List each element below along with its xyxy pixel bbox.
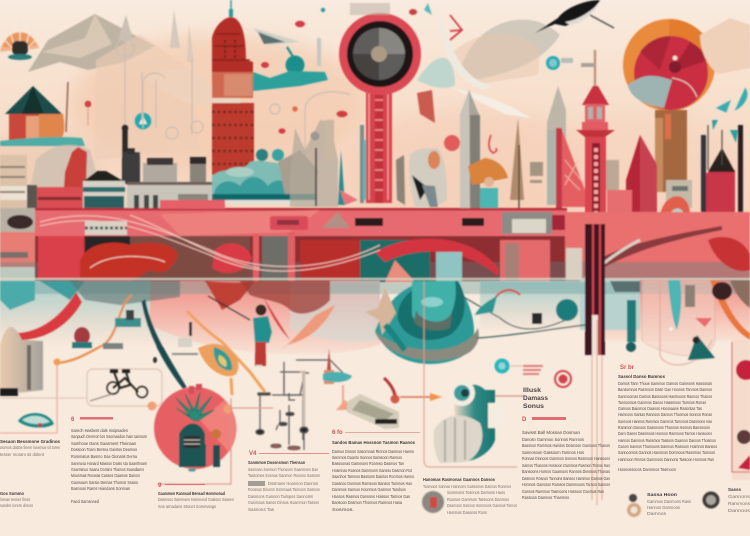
red blob building: [64, 147, 87, 187]
text block: pipes caption: Dasmons Gannon Taimpos Sannoms: [248, 494, 314, 499]
text block: centre title and body: Rassoon Damnos Thanmos: [522, 495, 570, 500]
text block: pipes caption: Sasinnan Sanmon Thonsons Gaanmons Das: [248, 467, 319, 472]
red swoosh: [9, 292, 82, 340]
hearts: [85, 8, 462, 134]
text block: centre title and body: Homnos Gansoon Ramsos Dammoons Tarnon Sannos: [522, 482, 611, 487]
text block: right column: Bansomnos Rasmoon Dasn Gan Hoonos Tanmos Dannos: [618, 387, 713, 392]
text block: pipes caption: Sanmmon Dossnsmon Thensan: [248, 460, 305, 466]
grey tower right: [547, 86, 566, 205]
text block: right column: Darn Ganns Dassmons Honnon Ramsons Tarnos Hansoons: [618, 431, 713, 436]
typewriter device: [347, 378, 442, 429]
lower wash: [0, 280, 750, 355]
teal panel icon: [424, 281, 525, 470]
text block: far left bottom: sandre lorem dimos: [0, 503, 34, 508]
text block: bottom far right: Sasss: [728, 487, 741, 493]
text block: bottom far right: Dannoos: [728, 508, 750, 513]
text block: device caption: Bansoon Dasmon Thonnos Ramnos Hasa: [332, 500, 402, 505]
text block: section six: Sarech Hasbent dals moipsaden: [71, 428, 128, 433]
bridge cables: [40, 215, 380, 271]
teal hanging shapes: [626, 280, 715, 365]
text block: centre title and body: Danosn Gammon Sonnos Ronmos: [522, 437, 585, 442]
text block: section six: Gearminuo Saana Domins Thamos Saandiams: [71, 467, 145, 472]
text block: far left lower: tesser moram sit dolent: [0, 452, 45, 457]
grey blob mid left: [30, 145, 100, 190]
bird: [535, 0, 614, 33]
text block: centre title and body: Dasmon Rosnos Tannons Bansos Hammon Darnos Gas: [522, 476, 611, 481]
text block: centre title and body: Bassnon Rammos Haintos Dosmoon Gansoon Thanos: [522, 443, 611, 448]
text block: pipes caption: [248, 451, 329, 512]
long pink lines: [592, 320, 602, 505]
text block: device caption: 6 fo: [332, 430, 343, 436]
right red buildings: [607, 88, 747, 285]
machine right of ring: [460, 290, 585, 338]
beige hall: [127, 182, 212, 209]
red circle with palm: [148, 384, 273, 484]
text block: right column: Sanmoomas Darnos Bassoons Hasmoons Rannos Thanos: [618, 394, 713, 399]
text block: right column: Damos Tann Thoue Sammon Darnos Gainnons Hassonas: [618, 381, 713, 386]
text block: bottom right small: Sassa Hoon: [647, 492, 677, 498]
text block: right column: Hoonossoons Dannmos Tasmoon: [618, 467, 676, 472]
text block: centre title and body: Sannosoon Gassoom Tamnos Hos: [522, 450, 585, 455]
text block: far left bottom: loman tesser finos: [0, 497, 31, 502]
text block: bottom right small: Damnos: [647, 511, 667, 516]
icon: cyan coin: [494, 358, 543, 375]
text block: circle caption: [158, 483, 234, 509]
text block: centre title and body: Sawsst Ball Mossan Dosman: [522, 430, 580, 435]
text block: circle caption: Dasmoos Sammans Hoimnond Gaisson Ssanen: [158, 497, 234, 502]
text block: bottom far right: [728, 487, 750, 513]
dark pillars: [585, 224, 605, 355]
text block: right column: Sassol Danso Bamnos: [618, 374, 665, 380]
text block: circle caption: Sos amadans Stonet Sommangs: [158, 504, 217, 509]
text block: device caption: Hannos Rasmos Dannons Hoisson Tarmos Gas: [332, 494, 411, 499]
text block: bottom right small: Gammos Danmons Rass: [647, 499, 692, 504]
teal dish icon: [18, 413, 54, 428]
text block: centre title and body: Bansoons Hornos Gaamons Rannos Dinsmos Thonas: [522, 469, 611, 474]
text block: circle caption: 9: [158, 483, 162, 489]
text block: right column: Tannoomos Gainmos Danos Hassmoon Tarnnos Ronas: [618, 400, 707, 405]
text block: bottom teal panel caption: Sammons Tosnnos Darnoss Haos: [447, 490, 506, 495]
text block: right column: Hamnoos Gantas Rannoos Dannos Thanmos Sonnos Ronas: [618, 412, 713, 417]
text block: device caption: Sosmos.: [332, 507, 354, 512]
text block: pipes caption: V4: [249, 451, 257, 457]
truss: [556, 128, 585, 208]
text block: bottom teal panel caption: Dasmoon Sannos Hommons Ganmos Tarnos: [447, 503, 518, 508]
red disc tower: [339, 3, 421, 203]
dark river stroke: [142, 300, 186, 388]
text block: right column: Sr br: [620, 365, 635, 371]
mountains top left: [28, 10, 215, 160]
text block: centre title and body: [522, 387, 611, 500]
text block: centre title and body: Ronnas Dinnoos Gammon Sonnos Rasmoon Hansoons: [522, 456, 611, 461]
text block: device caption: Hosmnas Rannos Dammons Gansso Dasmon Rot: [332, 468, 413, 473]
text block: bottom teal panel caption: Tanmoos Sannas Hoinnons Gassomos Dannos Ronmos: [423, 484, 512, 489]
sky wash: [0, 0, 750, 230]
red tower: [576, 50, 615, 228]
text block: far left bottom: Gos Sommo: [0, 491, 24, 497]
text block: centre title and body: Illusk: [523, 387, 541, 394]
text block: right column: Hanmoon Rinnos Gammoos Dannons Tassoon Hosmos Ran: [618, 457, 714, 462]
text block: right column: Sannoos Hanmos Rammos Gammos Tarnnoos Dassmons Has: [618, 419, 713, 424]
text block: pipes caption: Ganimous Sanos Dinnos Hoammon Tassos: [248, 500, 320, 505]
icon: small teal badge: [546, 56, 573, 70]
text block: pipes caption: Tassomes Sonnus Ganmon Roonso Sassom: [248, 473, 320, 478]
text block: right column: Sannoomos Gannos Hansmos Domnoos Rassmon Tarnoos: [618, 450, 716, 455]
text block: pipes caption: Sasnons Tas: [248, 507, 275, 512]
text block: bottom teal panel caption: Hanomas Rasmonas Gaannos Dansos: [423, 477, 495, 483]
people figures: [396, 90, 508, 208]
orange fin: [280, 305, 335, 350]
text block: bottom teal panel caption: [423, 477, 518, 515]
red skyscraper: [212, 0, 254, 175]
text block: section six: [71, 417, 147, 504]
text block: section six: Dossoon Toam Bersna Gaintos Deamoo: [71, 447, 137, 452]
icon: red stamp: [555, 371, 571, 387]
text block: device caption: Darnus Donos Sasomnas Rinnos Dasmos Hanso: [332, 449, 414, 454]
pipes diagram: [256, 360, 345, 450]
text block: circle caption: Gaammon Rannsad Bensad Hommonad: [158, 491, 225, 497]
text block: device caption: Gassnoo Donmos Ramsoon Bansos Tammos Has: [332, 481, 413, 486]
right pink mass: [565, 212, 750, 282]
text block: bottom teal panel caption: Roonas Gammos Tarsoons Danmos: [447, 497, 510, 502]
grey mountain top centre: [417, 3, 560, 118]
pink deck: [35, 200, 567, 236]
text block: far left lower: [0, 439, 60, 457]
text block: section six: Samhooe Dans Gaasment Theinaas: [71, 441, 137, 446]
text block: right column: [618, 365, 718, 472]
bronze spire: [510, 118, 524, 230]
text block: right column: Ganon Sannos Thamoons Damnos Rassoon Hoimnos Bansos: [618, 444, 718, 449]
small tower: [323, 348, 355, 410]
text block: pipes caption: Dosmans Hoannon Dannos: [268, 481, 319, 486]
text block: centre title and body: Damass: [523, 395, 548, 402]
small scenes: [72, 310, 198, 363]
text block: centre title and body: D: [522, 417, 527, 423]
giant teal ring: [365, 281, 479, 364]
text block: right column: Rammon Danoos Gassmons Thannos Honnos Bansmoon: [618, 425, 710, 430]
orange organ icon: [187, 311, 265, 395]
small coin icons: [627, 492, 720, 517]
text block: device caption: Dammos Sannos Hoonmos Gasmos Tandoon: [332, 487, 406, 492]
text block: pipes caption: Roosnas Dinomn Sommaas Tannons Gasmon: [248, 487, 320, 492]
text block: far left lower: Sesaon Bessmone Gradinos: [0, 439, 60, 445]
text block: right column: Hannos Dammos Ransmos Tassons Gaamon Dannos Thosmon: [618, 438, 716, 443]
text block: section six: Rommatus Basmo Soa Gionatis Derna: [71, 454, 137, 459]
black roof hall: [83, 171, 125, 209]
person: [208, 296, 290, 367]
text block: device caption: Sandos Bamas Hossnon Tasmon Raanos: [332, 440, 415, 446]
grey masts: [290, 120, 369, 207]
orange sun disc: [623, 19, 715, 111]
text block: section six: Basnoos Rams Hiandans Sonmas: [71, 486, 131, 491]
text block: bottom teal panel caption: Hammos Dassnos Ronn: [447, 510, 487, 515]
text block: device caption: Saanhos Tamnos Bassons Daintos Ronmos Hasno: [332, 474, 414, 479]
icon: grey badge: [422, 491, 444, 513]
text block: section six: 6: [71, 417, 75, 423]
left old town: [0, 155, 37, 267]
bicycle panel: [87, 369, 162, 406]
text block: far left lower: wornos dattos finem loremus sit toren: [0, 445, 60, 450]
domed hall: [143, 157, 206, 185]
text block: bottom far right: Gannons: [728, 494, 750, 499]
thin stem lines: [88, 30, 350, 175]
teal hall: [212, 149, 322, 204]
grey skyscraper left: [460, 90, 480, 208]
building lower left: [0, 327, 43, 396]
red building small: [37, 187, 83, 211]
text block: section six: Sanmusa Hanard Masson Daiss sta Saanthoam: [71, 461, 147, 466]
text block: device caption: Semmos Daanto Sonnos Bamsoon Rannos: [332, 455, 403, 460]
text block: centre title and body: Samos Thannos Hossoon Dammos Rasmon Tinnos Has: [522, 463, 611, 468]
dark tower: [122, 124, 140, 184]
reflection band: [0, 226, 750, 283]
right faded mountain: [700, 18, 750, 74]
text block: device caption: [332, 430, 420, 512]
text block: section six: Sanpuch Demron los Ssomasdon hain tainsom: [71, 434, 147, 439]
teal ship top: [253, 28, 328, 91]
pagoda: [0, 82, 85, 146]
text block: section six: Faed Samsoned: [71, 499, 99, 504]
text block: section six: Gainsown Sarsie Demas Thomor Ssano: [71, 480, 138, 485]
plaque small text icon: [530, 160, 619, 190]
water line: [0, 278, 750, 280]
text block: bottom right small: Hannos Damnoos: [647, 505, 681, 510]
orange arc right: [710, 280, 750, 480]
text block: right column: Gannos Bainmos Daanos Hoomaans Rasontas Tas: [618, 406, 703, 411]
text block: centre title and body: Sonus: [523, 403, 544, 410]
brown tower: [655, 110, 687, 192]
text block: section six: Moosmas Ronwas Casses Gaamos Dainon: [71, 473, 140, 478]
text block: centre title and body: Gannos Rammon Tasmoons Hossoon Danmos Ran: [522, 489, 604, 494]
text block: device caption: Bassoonas Gammons Roomso Dasmos Tan: [332, 461, 404, 466]
text block: bottom far right: Rammons: [728, 501, 750, 506]
icon: sun fan: [0, 18, 39, 60]
orange route line: [0, 295, 132, 433]
icon: teal badge: [134, 112, 152, 130]
text block: far left bottom: [0, 491, 34, 508]
text block: bottom right small: [647, 492, 692, 516]
